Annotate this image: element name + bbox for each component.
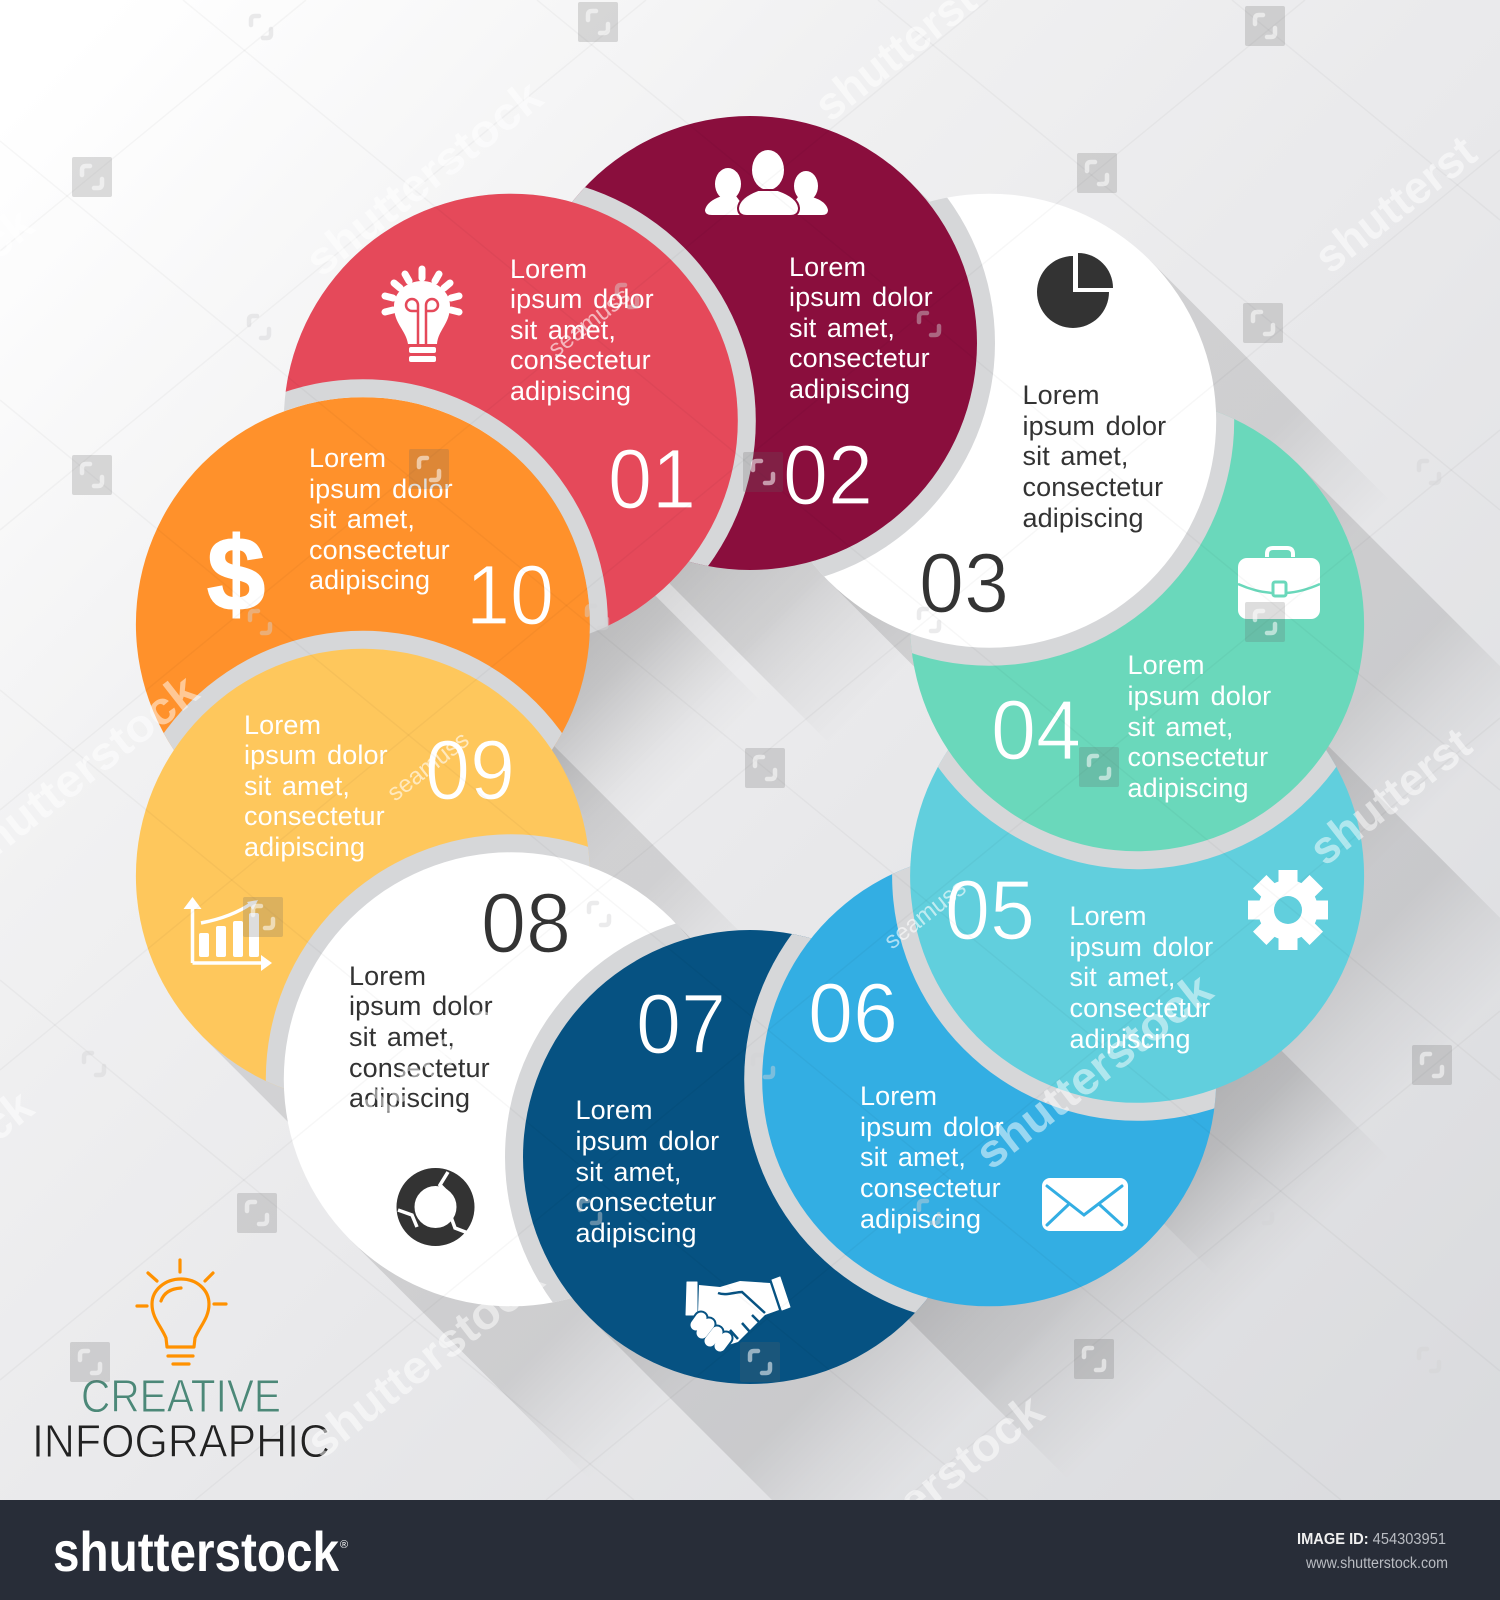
text block 04: consectetur [1128,742,1268,772]
text block 07: adipiscing [576,1218,697,1248]
icon: light bulb [385,269,459,362]
text block 03: sit amet, [1022,441,1128,471]
text block 04: Lorem [1128,650,1205,680]
logo: creative infographic [32,1260,330,1467]
text block 01: adipiscing [510,376,631,406]
text block 05: sit amet, [1070,962,1175,992]
text block 04 [1128,650,1271,803]
number 09: 09 [425,723,515,817]
icon: handshake [686,1277,790,1347]
icon: dollar: $ [207,517,265,633]
number 02: 02 [783,428,873,522]
footer bar [0,1500,1500,1600]
registered mark: ® [340,1539,348,1551]
text block 05: consectetur [1070,993,1210,1023]
icon: people [705,150,828,216]
panel 09: yellow [136,630,590,1088]
number 08: 08 [481,876,571,970]
text block 02: ipsum dolor [789,282,933,312]
text block 01: ipsum dolor [510,284,654,314]
text block 06: ipsum dolor [860,1112,1004,1142]
text block 06: adipiscing [860,1204,981,1234]
text block 09: ipsum dolor [244,740,388,770]
text block 04: adipiscing [1128,773,1249,803]
text block 01: Lorem [510,254,587,284]
panel 02: maroon [572,116,995,576]
text block 06: consectetur [860,1173,1001,1203]
text block 02: consectetur [789,343,930,373]
number 05: 05 [945,863,1035,957]
text block 06: Lorem [860,1081,937,1111]
panel 03: white [812,194,1234,666]
text block 09 [244,710,388,862]
footer logo: shutterstock [53,1520,340,1583]
text block 03 [1022,380,1166,533]
number 06: 06 [808,966,898,1060]
text block 09: Lorem [244,710,321,740]
text block 05: Lorem [1070,901,1147,931]
text block 06: sit amet, [860,1142,966,1172]
text block 02: Lorem [789,252,866,282]
watermark overlay: seamuss [382,726,474,807]
text block 09: adipiscing [244,832,365,862]
text block 05: adipiscing [1070,1024,1191,1054]
text block 09: sit amet, [244,771,350,801]
icon: gear [1248,870,1328,950]
text block 08: consectetur [349,1053,490,1083]
text block 07: sit amet, [576,1157,681,1187]
panel 05: cyan [892,750,1364,1121]
text block 02: adipiscing [789,374,910,404]
text block 07 [576,1095,719,1248]
text block 10: Lorem [309,443,386,473]
panel 06: blue [744,866,1216,1313]
text block 03: ipsum dolor [1022,411,1166,441]
watermark overlay: shutterstock [292,959,549,1176]
watermark overlay: shutterstock [796,1383,1053,1600]
text block 03: adipiscing [1022,503,1144,533]
watermark overlay: shutterst [1304,125,1486,283]
watermark overlay: shutterstock [295,69,552,286]
text block 09: consectetur [244,801,385,831]
text block 10 [309,443,453,595]
icon: cycle arrows [398,1172,468,1237]
icon: briefcase [1238,548,1320,619]
watermark overlay: shutterstock [296,1251,553,1468]
number 01: 01 [608,432,696,526]
text block 10: adipiscing [309,565,430,595]
text block 08: ipsum dolor [349,991,493,1021]
text block 03: Lorem [1022,380,1100,410]
icon: pie chart [1037,253,1113,328]
website: www.shutterstock.com [1305,1555,1448,1572]
number 03: 03 [919,536,1009,630]
panel 10: orange [136,397,590,851]
panel 07: navy [505,924,928,1384]
text block 10: consectetur [309,535,450,565]
text block 01: sit amet, [510,315,616,345]
icon: bar chart [184,897,272,971]
watermark overlay: seamuss [543,282,635,363]
text block 01: consectetur [510,345,651,375]
panel 04: mint [910,412,1364,870]
text block 08: sit amet, [349,1022,455,1052]
text block 07: Lorem [576,1095,653,1125]
text block 05: ipsum dolor [1070,932,1213,962]
text block 08: adipiscing [349,1083,470,1113]
number 10: 10 [466,548,554,642]
text block 10: sit amet, [309,504,415,534]
text block 02: sit amet, [789,313,895,343]
watermark overlay: seamuss [879,874,971,955]
watermark overlay: shutterstock [965,962,1222,1179]
text block 05 [1070,901,1213,1054]
number 07: 07 [636,977,726,1071]
text block 07: consectetur [576,1187,716,1217]
watermark overlay: shutterst [1299,717,1481,875]
image id: IMAGE ID: 454303951 [1297,1531,1446,1548]
text block 08: Lorem [349,961,426,991]
text block 07: ipsum dolor [576,1126,719,1156]
text block 04: sit amet, [1128,712,1233,742]
text block 03: consectetur [1022,472,1163,502]
panel 01: red [284,187,756,634]
text block 08 [349,961,493,1113]
icon: envelope [1042,1178,1128,1231]
heading: creative: CREATIVE [81,1370,281,1422]
text block 02 [789,252,933,404]
long shadows [202,182,1500,1558]
text block 10: ipsum dolor [309,474,453,504]
heading: infographic: INFOGRAPHIC [32,1415,330,1467]
text block 06 [860,1081,1004,1234]
text block 01 [510,254,654,406]
panel 08: white [266,834,689,1306]
text block 04: ipsum dolor [1128,681,1271,711]
number 04: 04 [991,683,1081,777]
icon: outline bulb [137,1260,226,1364]
